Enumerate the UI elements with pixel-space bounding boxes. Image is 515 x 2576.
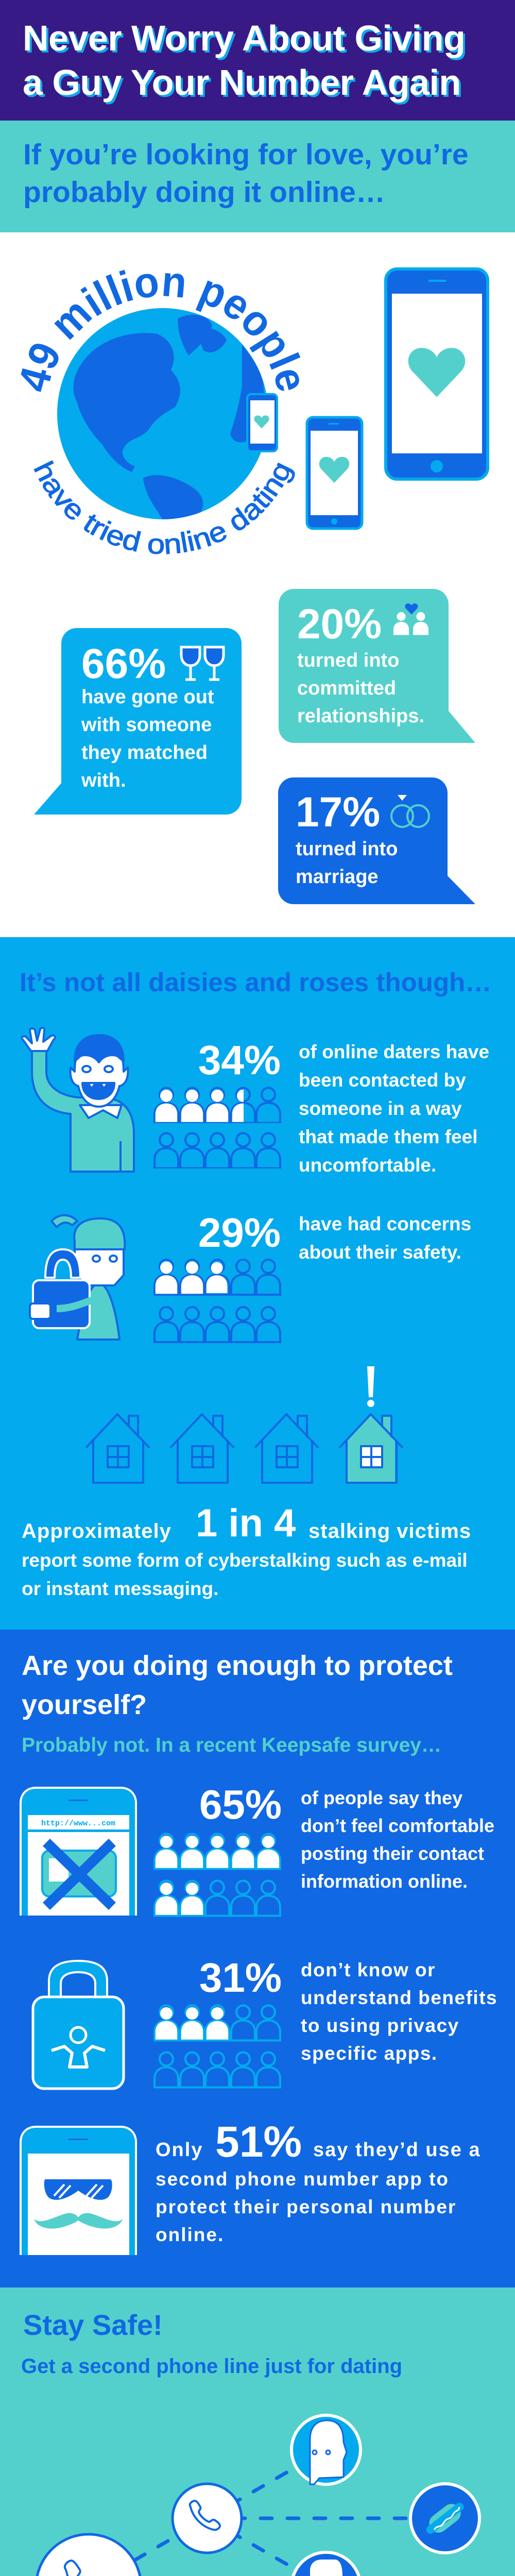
text: 51% xyxy=(156,2117,481,2245)
text: 65% description: of people say they xyxy=(301,1787,462,1808)
text: 34% description: of online daters have xyxy=(299,1041,489,1062)
title: Never Worry About Giving xyxy=(23,18,465,58)
text: 51%: online. xyxy=(156,2224,224,2245)
icon: big phone xyxy=(386,269,488,479)
heading: protect yourself: yourself? xyxy=(22,1689,147,1720)
text: 1 in 4: or instant messaging. xyxy=(22,1578,218,1599)
text: 65% description xyxy=(301,1787,494,1892)
globe with curved text: have tried online dating xyxy=(34,460,295,554)
text: 51%: Only xyxy=(156,2139,203,2161)
text: 34% description: that made them feel xyxy=(299,1126,477,1147)
stat: 29%: 29% xyxy=(198,1210,281,1256)
text: 34% description: someone in a way xyxy=(299,1098,462,1119)
stat: 34%: 34% xyxy=(198,1037,281,1083)
avatar: hotdog xyxy=(410,2484,479,2553)
text: 1 in 4: Approximately xyxy=(22,1520,171,1543)
text: 20%: turned into xyxy=(297,650,399,671)
text: 66%: they matched xyxy=(81,742,208,764)
stat: 65%: 65% xyxy=(199,1782,282,1827)
subtitle: If you’re looking for love, you’re xyxy=(23,138,469,171)
subtitle: probably doing it online… xyxy=(23,176,385,209)
text: 20%: committed xyxy=(297,677,396,699)
heading: daisies: It’s not all daisies and roses though… xyxy=(20,968,491,997)
text: 31% description: specific apps. xyxy=(301,2043,438,2064)
text: 1 in 4: 1 in 4 xyxy=(196,1501,296,1545)
text: 20%: 20% xyxy=(297,601,382,648)
heading: stay safe: Stay Safe! xyxy=(23,2309,163,2341)
text: 17%: turned into xyxy=(296,838,398,860)
section: daisies background xyxy=(0,937,515,1630)
heading: protect yourself: Are you doing enough to protect xyxy=(22,1650,453,1681)
text: 17% xyxy=(296,789,398,888)
text: 1 in 4: stalking victims xyxy=(308,1520,471,1543)
text: 65% description: don’t feel comfortable xyxy=(301,1815,494,1836)
text: 20% xyxy=(297,601,424,727)
text: 17%: marriage xyxy=(296,866,379,888)
icon: phone with crossed ID: http://www...com xyxy=(41,1819,115,1828)
title: a Guy Your Number Again xyxy=(23,62,461,103)
section: stay safe background xyxy=(0,2287,515,2576)
icon: call circle xyxy=(173,2484,242,2553)
text: 29% description: have had concerns xyxy=(299,1213,471,1234)
icon: wine glasses xyxy=(181,647,224,680)
people grid: 31% xyxy=(154,2005,280,2088)
subheading: keepsafe survey: Probably not. In a recent Keepsafe survey… xyxy=(22,1734,441,1756)
heading: protect yourself xyxy=(22,1650,453,1720)
people grid: 65% xyxy=(154,1834,280,1916)
subtitle xyxy=(23,138,469,209)
text: 29% description xyxy=(299,1213,471,1263)
small phone on globe xyxy=(247,394,277,451)
text: 34% description: uncomfortable. xyxy=(299,1155,436,1176)
text: 51%: say they’d use a xyxy=(313,2139,481,2161)
text: 65% description: posting their contact xyxy=(301,1843,484,1864)
bubble: 66% xyxy=(34,628,242,815)
text: 31% description: don’t know or xyxy=(301,1959,436,1980)
text: 17%: 17% xyxy=(296,789,380,836)
text: 66%: have gone out xyxy=(81,686,214,708)
text: 29% description: about their safety. xyxy=(299,1242,461,1263)
icon: phone with crossed ID xyxy=(21,1788,136,1916)
section: protect yourself background xyxy=(0,1630,515,2287)
text: 66%: with someone xyxy=(81,714,212,736)
text: 31% description: understand benefits xyxy=(301,1987,497,2008)
diagram: second phone line network xyxy=(36,2415,479,2576)
icon: phone with disguise xyxy=(21,2127,136,2255)
subheading: second line: Get a second phone line just for dating xyxy=(21,2355,402,2378)
header band xyxy=(0,0,515,121)
icon: exclamation xyxy=(367,1366,374,1407)
text: 66% xyxy=(81,640,214,791)
people grid: 34% xyxy=(154,1088,280,1168)
icon: couple xyxy=(393,603,428,635)
text: 1 in 4: report some form of cyberstalking such as e-mail xyxy=(22,1550,468,1571)
title xyxy=(23,18,466,105)
icon: rings xyxy=(391,795,429,827)
illustration: waving vampire xyxy=(22,1028,134,1172)
text: 66%: with. xyxy=(81,770,126,791)
people grid: 29% xyxy=(154,1260,280,1342)
icon: middle phone xyxy=(307,417,362,529)
bubble: 20% xyxy=(279,589,475,743)
subtitle band xyxy=(0,121,515,232)
icon: padlock with shrug xyxy=(33,1961,124,2089)
text: 34% description: been contacted by xyxy=(299,1070,466,1091)
text: 51%: 51% xyxy=(215,2117,302,2166)
icon: main phone circle xyxy=(36,2534,141,2576)
text: 51%: protect their personal number xyxy=(156,2196,456,2217)
stat: 31%: 31% xyxy=(199,1955,282,2001)
avatar: man xyxy=(291,2415,360,2484)
globe with curved text xyxy=(21,270,301,554)
text: 31% description: to using privacy xyxy=(301,2015,459,2036)
avatar: sunglasses guy xyxy=(291,2552,360,2576)
text: 31% description xyxy=(301,1959,497,2064)
text: 1 in 4 xyxy=(22,1501,471,1599)
globe with curved text: 49 million people xyxy=(21,270,301,392)
text: 66%: 66% xyxy=(81,640,166,687)
text: 51%: second phone number app to xyxy=(156,2168,449,2190)
illustration: girl hugging lock xyxy=(30,1215,125,1340)
bubble: 17% xyxy=(278,777,475,904)
icon: four houses xyxy=(86,1366,403,1483)
text: 34% description xyxy=(299,1041,489,1176)
text: 20%: relationships. xyxy=(297,705,424,727)
text: 65% description: information online. xyxy=(301,1871,468,1892)
